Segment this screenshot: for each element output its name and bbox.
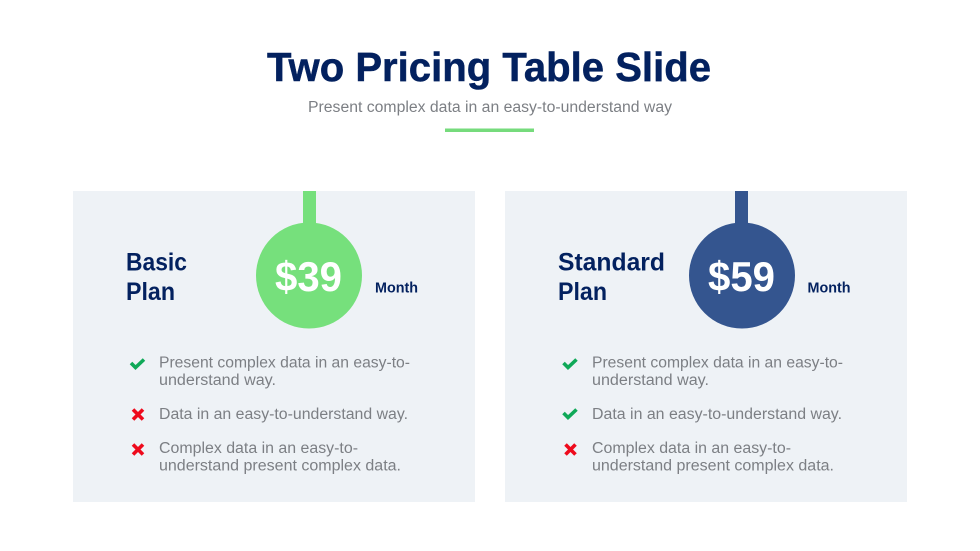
feature 2: Data in an easy-to-understand way. [159, 406, 408, 423]
panel: standard plan [505, 191, 907, 502]
feature 3: Complex data in an easy-to- [159, 440, 358, 457]
panel: basic plan [73, 191, 475, 502]
price badge: $59 [689, 191, 795, 328]
feature 1: Present complex data in an easy-to- [592, 354, 843, 372]
feature 1 [131, 354, 410, 389]
feature 3 [133, 440, 401, 474]
feature 1: understand way. [159, 372, 276, 389]
feature 2: Data in an easy-to-understand way. [592, 406, 842, 423]
plan name [126, 248, 187, 306]
subtitle: Present complex data in an easy-to-understand way [308, 99, 672, 116]
title underline [445, 128, 534, 132]
feature 1 [564, 354, 843, 389]
feature 1: Present complex data in an easy-to- [159, 354, 410, 372]
plan name: Plan [558, 278, 607, 306]
title: Two Pricing Table Slide [267, 44, 711, 90]
billing period: Month [808, 280, 850, 296]
panel background [505, 191, 907, 502]
billing period: Month [375, 280, 418, 296]
feature 3: Complex data in an easy-to- [592, 440, 791, 457]
panel background [73, 191, 475, 502]
plan name: Plan [126, 278, 175, 306]
price badge: $39 [256, 191, 362, 328]
feature 1: understand way. [592, 372, 709, 389]
plan name [558, 248, 665, 306]
feature 3: understand present complex data. [592, 458, 834, 474]
feature 3 [566, 440, 834, 474]
price badge: $59: $59 [708, 253, 775, 300]
plan name: Basic [126, 248, 187, 276]
price badge: $39: $39 [275, 253, 342, 300]
feature 3: understand present complex data. [159, 458, 401, 474]
plan name: Standard [558, 248, 665, 276]
